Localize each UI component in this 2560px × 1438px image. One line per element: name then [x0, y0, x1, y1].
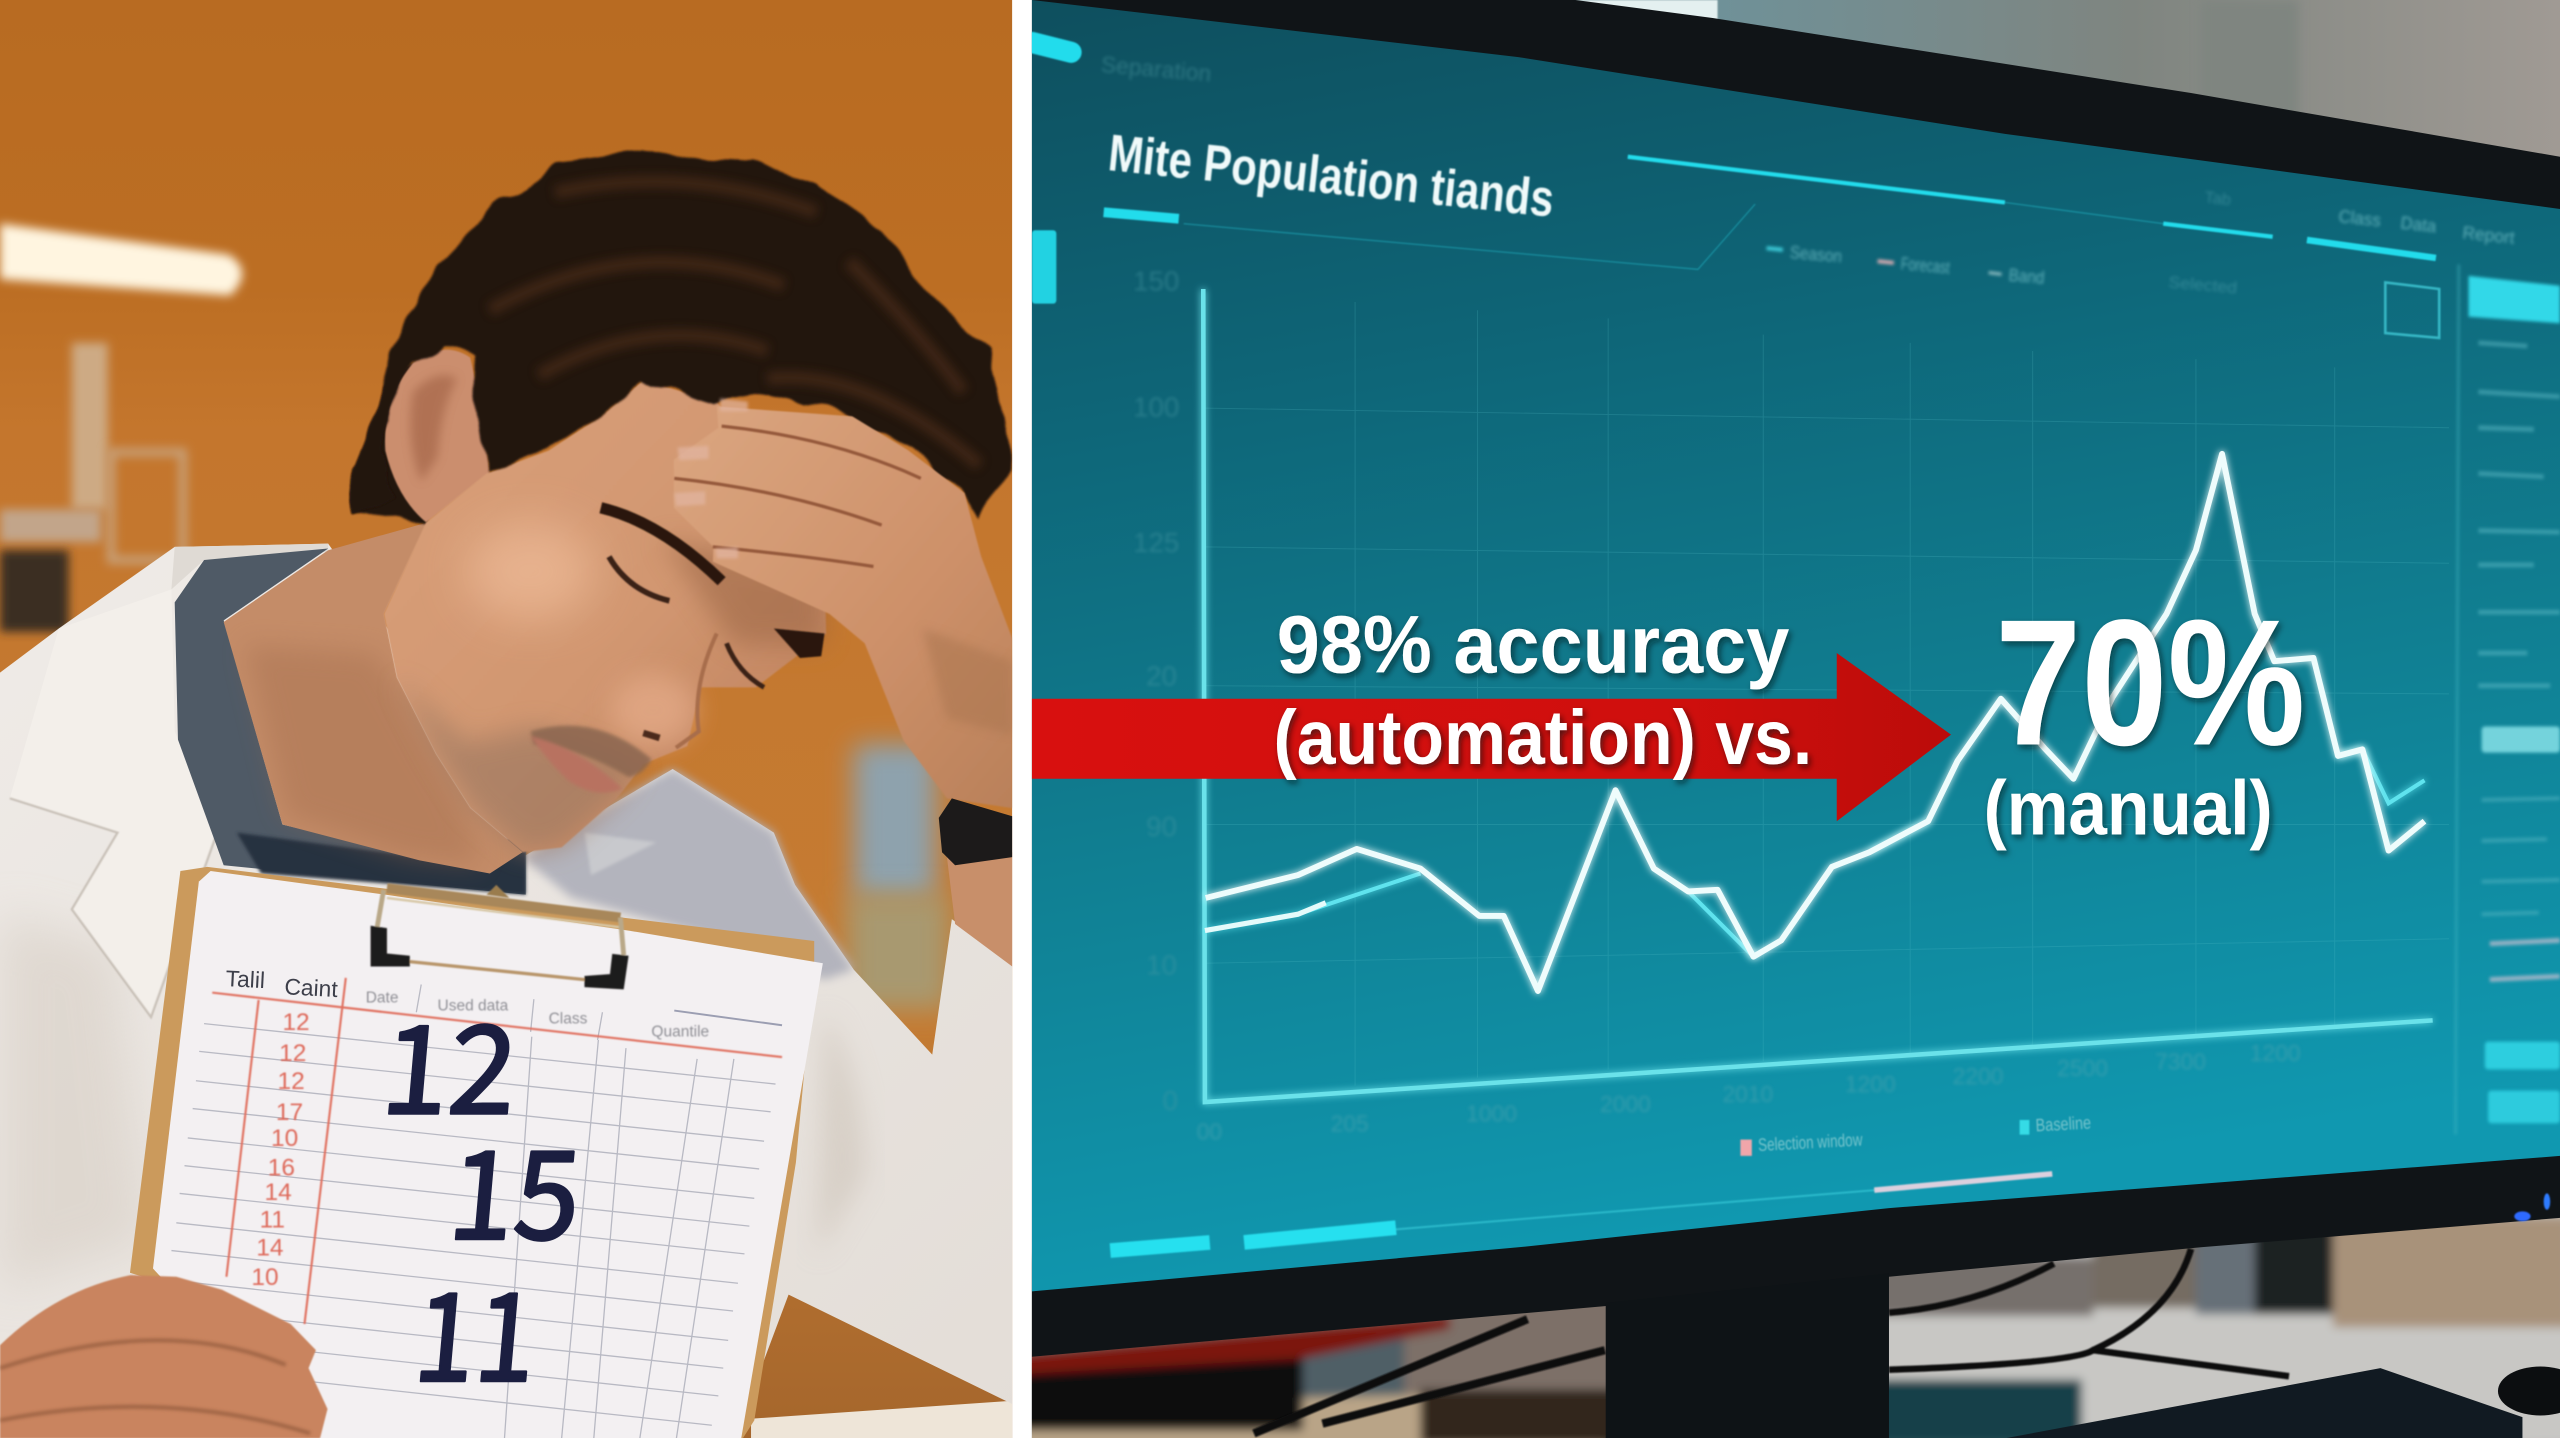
table header labels: Talil	[225, 965, 266, 993]
stat text: 70%: 70%	[1995, 582, 2305, 783]
face shading	[397, 522, 824, 852]
breadcrumb label: Separation	[1100, 51, 1212, 86]
red tally numbers: 14	[256, 1234, 284, 1261]
clipboard	[130, 867, 823, 1438]
y-axis tick labels: 0	[1162, 1085, 1178, 1116]
right side panel	[2456, 264, 2560, 1135]
table header labels: Date	[366, 989, 398, 1006]
wrist shading	[922, 629, 1012, 735]
bottom legend	[1740, 1113, 2092, 1156]
table header labels	[225, 965, 709, 1041]
x-axis tick labels: 2000	[1600, 1091, 1651, 1117]
stat text: (automation) vs.: (automation) vs.	[1273, 696, 1812, 781]
bottom glowing strokes	[1110, 1174, 2052, 1251]
table header labels: Caint	[284, 973, 339, 1002]
red tally numbers: 17	[276, 1099, 303, 1126]
neck shadow	[245, 645, 482, 865]
red tally numbers: 12	[279, 1040, 306, 1067]
x-axis tick labels: 1200	[2250, 1040, 2301, 1066]
eyes, brows, nose and mouth	[531, 508, 824, 793]
x-axis tick labels: 2500	[2057, 1055, 2108, 1081]
dashboard glowing header strokes	[1032, 42, 2436, 269]
power LEDs	[2514, 1193, 2550, 1221]
table header labels: Used data	[438, 998, 509, 1015]
handwritten count 11: 11	[408, 1240, 545, 1417]
chart legend: Report	[2462, 222, 2516, 248]
x-axis tick labels: 7300	[2155, 1048, 2206, 1074]
cables right of stand	[1889, 1249, 2289, 1376]
chart legend	[1767, 189, 2516, 297]
red tally numbers: 12	[282, 1009, 310, 1036]
red margin lines	[212, 978, 782, 1324]
area below monitor, right of stand	[1878, 1208, 2560, 1438]
blurred office background	[1012, 0, 2560, 1438]
ear	[385, 350, 490, 522]
red tally numbers	[251, 1009, 310, 1291]
monitor bezel	[1032, 0, 2560, 1357]
ruled lines	[157, 984, 782, 1438]
chart legend: Season	[1789, 242, 1843, 266]
screen	[1032, 0, 2560, 1291]
red tally numbers: 14	[264, 1179, 292, 1206]
shirt	[175, 549, 526, 895]
chart legend: Class	[2338, 206, 2382, 230]
main white data series	[1206, 454, 2424, 991]
red tally numbers: 10	[251, 1264, 279, 1291]
cables left of stand	[1254, 1319, 1605, 1433]
bottom legend: Selection window	[1758, 1130, 1863, 1155]
red tally numbers: 10	[271, 1125, 298, 1152]
coat lapel	[58, 628, 176, 1013]
hair highlights	[490, 182, 980, 465]
stat text: (manual): (manual)	[1984, 766, 2273, 851]
keyboard	[2005, 1368, 2522, 1438]
wristwatch	[939, 798, 1012, 865]
red tally numbers: 12	[278, 1068, 305, 1095]
y-axis tick labels: 150	[1133, 266, 1179, 297]
inner ear	[410, 375, 457, 482]
x-axis tick labels: 205	[1331, 1110, 1369, 1136]
panel: monitor with mite population chart	[1012, 0, 2560, 1438]
handwritten count 12: 12	[376, 973, 525, 1149]
paper sheet	[153, 871, 823, 1438]
raised hand	[674, 398, 1012, 967]
stat text: 98% accuracy: 98% accuracy	[1277, 600, 1789, 691]
mouse	[2498, 1366, 2560, 1415]
chart legend: Selected	[2168, 273, 2238, 297]
chart legend: Tab	[2204, 189, 2232, 209]
x-axis tick labels: 1000	[1466, 1101, 1517, 1127]
chart title: Mite Population tiands	[1106, 124, 1557, 228]
finger lines	[674, 426, 921, 567]
bottom legend: Baseline	[2035, 1113, 2092, 1135]
stat: 98% accuracy (automation) vs.	[1273, 600, 1812, 781]
panel: stressed scientist with clipboard	[0, 0, 1012, 1438]
secondary cyan data series	[1205, 749, 2424, 957]
chart options box	[2385, 282, 2439, 338]
chart gridlines	[1205, 302, 2449, 1086]
orange lab background	[0, 0, 1012, 1438]
hair	[353, 152, 1010, 518]
x-axis tick labels: 1200	[1845, 1071, 1896, 1097]
handwritten count 15: 15	[443, 1098, 589, 1275]
y-axis tick labels: 100	[1133, 391, 1179, 422]
red tally numbers: 11	[260, 1207, 285, 1234]
ceiling light	[0, 224, 242, 296]
table edge	[751, 1401, 1012, 1438]
red arrow	[1032, 653, 1951, 821]
chart legend: Forecast	[1900, 253, 1951, 278]
neck	[224, 522, 522, 873]
hair behind ear	[353, 351, 428, 522]
manual data series	[1205, 903, 1326, 931]
stat: 70% (manual)	[1984, 582, 2305, 851]
table header labels: Quantile	[651, 1024, 709, 1041]
chart axes	[1203, 289, 2433, 1102]
y-axis tick labels: 10	[1146, 950, 1177, 981]
chart legend: Band	[2008, 265, 2045, 288]
forearm	[947, 852, 1012, 967]
x-axis tick labels: 00	[1197, 1119, 1222, 1145]
area below monitor, left of stand	[1012, 1257, 1616, 1438]
hand holding clipboard	[0, 1275, 328, 1438]
lab coat	[0, 544, 1012, 1438]
face	[384, 380, 826, 852]
monitor stand	[1606, 1273, 1889, 1438]
fingernails	[674, 398, 748, 558]
y-axis tick labels	[1133, 266, 1179, 1116]
x-axis tick labels	[1197, 1040, 2301, 1145]
y-axis tick labels: 20	[1146, 661, 1177, 692]
side tab	[1032, 230, 1056, 304]
shaded shoulder	[522, 769, 854, 980]
metal clip	[371, 885, 629, 989]
red tally numbers: 16	[268, 1154, 295, 1181]
clipboard backing	[130, 867, 814, 1438]
x-axis tick labels: 2010	[1722, 1081, 1773, 1107]
y-axis tick labels: 90	[1146, 811, 1177, 842]
x-axis tick labels: 2200	[1953, 1063, 2003, 1089]
y-axis tick labels: 125	[1133, 527, 1179, 558]
table header labels: Class	[549, 1011, 588, 1028]
chart legend: Data	[2400, 213, 2437, 236]
